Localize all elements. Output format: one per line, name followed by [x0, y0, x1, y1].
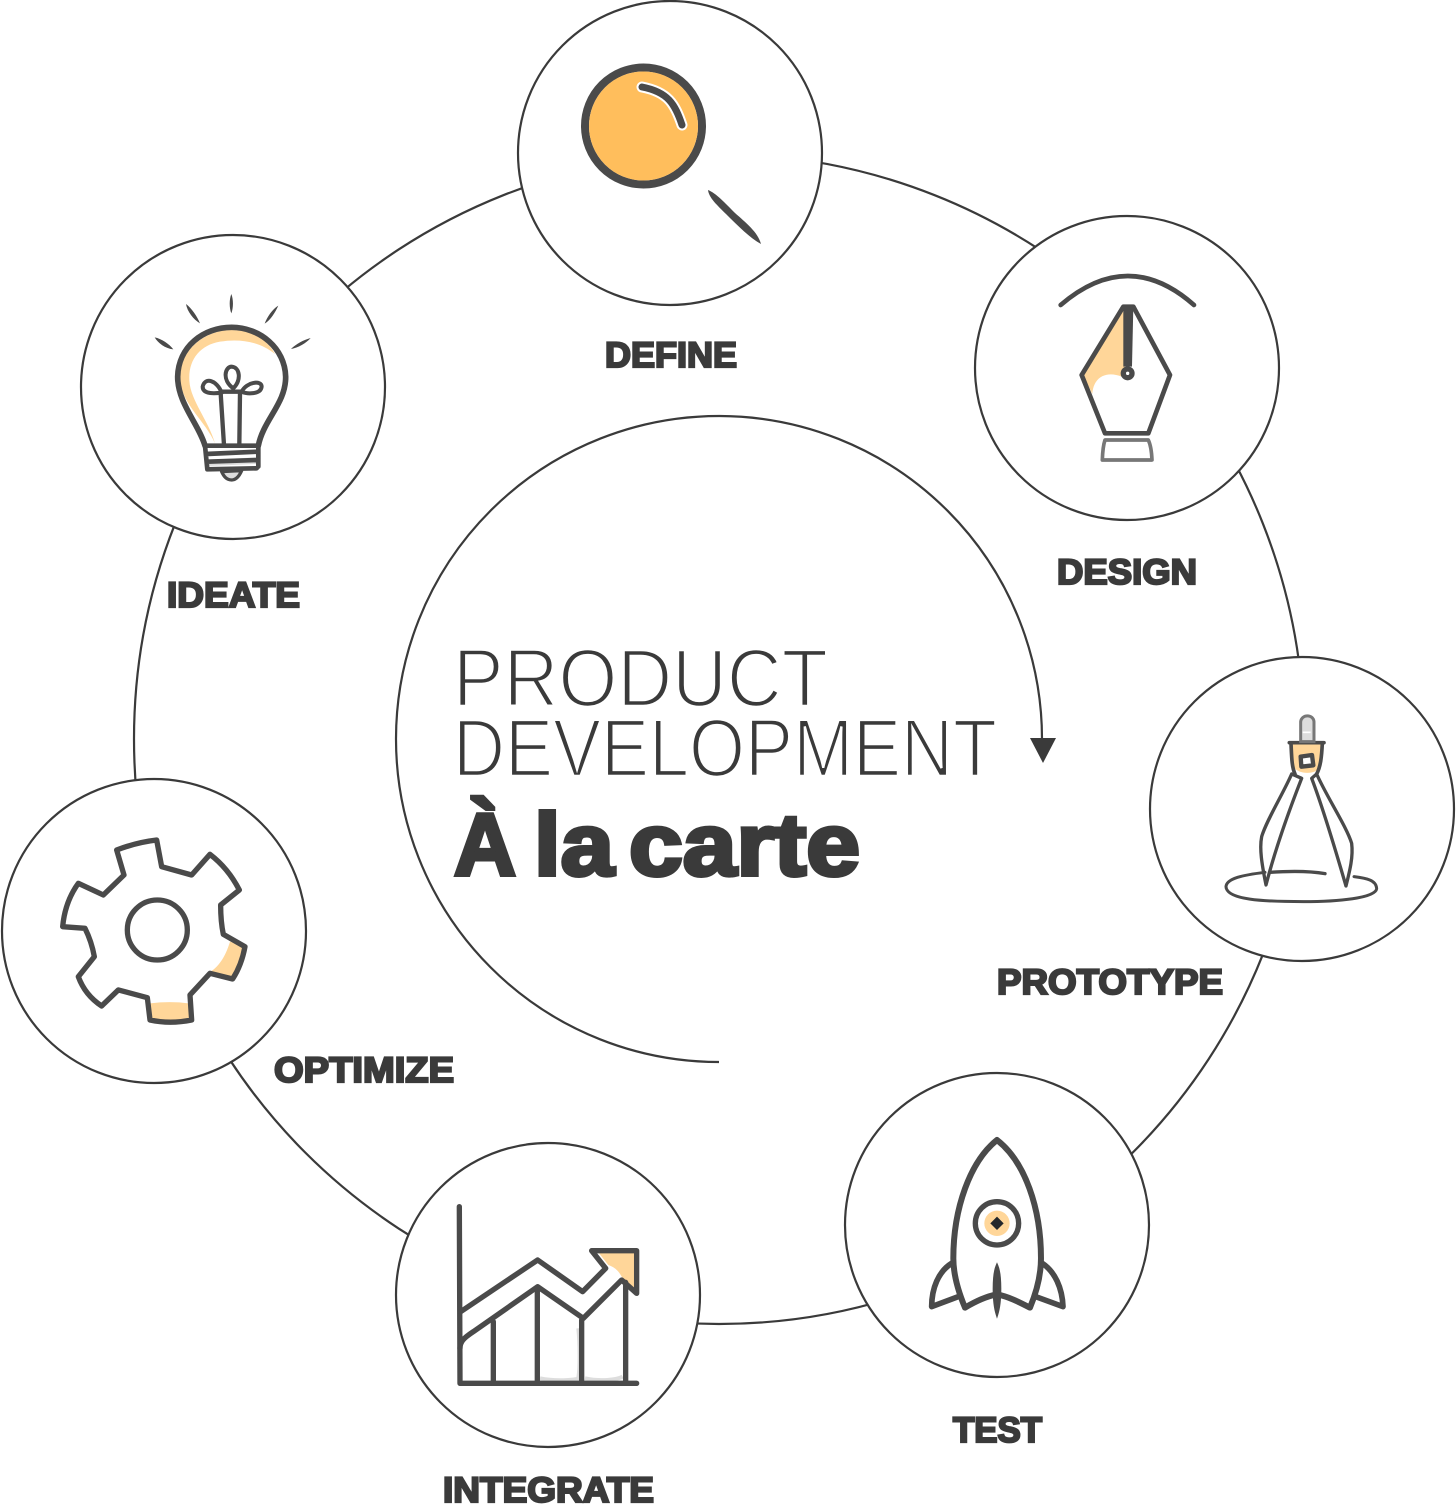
icon: compass — [1226, 716, 1377, 902]
label: design: DESIGN — [1057, 553, 1197, 592]
label: test: TEST — [953, 1411, 1042, 1450]
outer process ring — [134, 154, 1304, 1324]
label: optimize: OPTIMIZE — [274, 1051, 454, 1090]
icon: gear — [63, 840, 245, 1022]
step: define — [518, 1, 822, 375]
step: integrate — [396, 1143, 700, 1505]
center title: À — [454, 795, 516, 894]
step: test — [845, 1073, 1149, 1450]
center title: PRODUCT — [453, 633, 828, 724]
center title: DEVELOPMENT — [453, 703, 997, 794]
label: prototype: PROTOTYPE — [997, 963, 1223, 1002]
step: ideate — [81, 235, 385, 615]
step: prototype — [997, 657, 1454, 1002]
step: optimize — [2, 779, 454, 1090]
label: define: DEFINE — [605, 336, 737, 375]
center title: la — [534, 795, 615, 894]
icon: rocket — [932, 1140, 1063, 1314]
center title — [453, 633, 997, 894]
inner arrow arc — [396, 416, 1056, 1062]
icon: light bulb — [155, 294, 311, 480]
label: ideate: IDEATE — [167, 576, 300, 615]
icon: pen nib — [1061, 276, 1194, 460]
icon: magnifying glass — [585, 68, 761, 244]
step: design — [975, 216, 1279, 592]
icon: growth chart — [459, 1207, 637, 1383]
center title: carte — [629, 795, 860, 894]
